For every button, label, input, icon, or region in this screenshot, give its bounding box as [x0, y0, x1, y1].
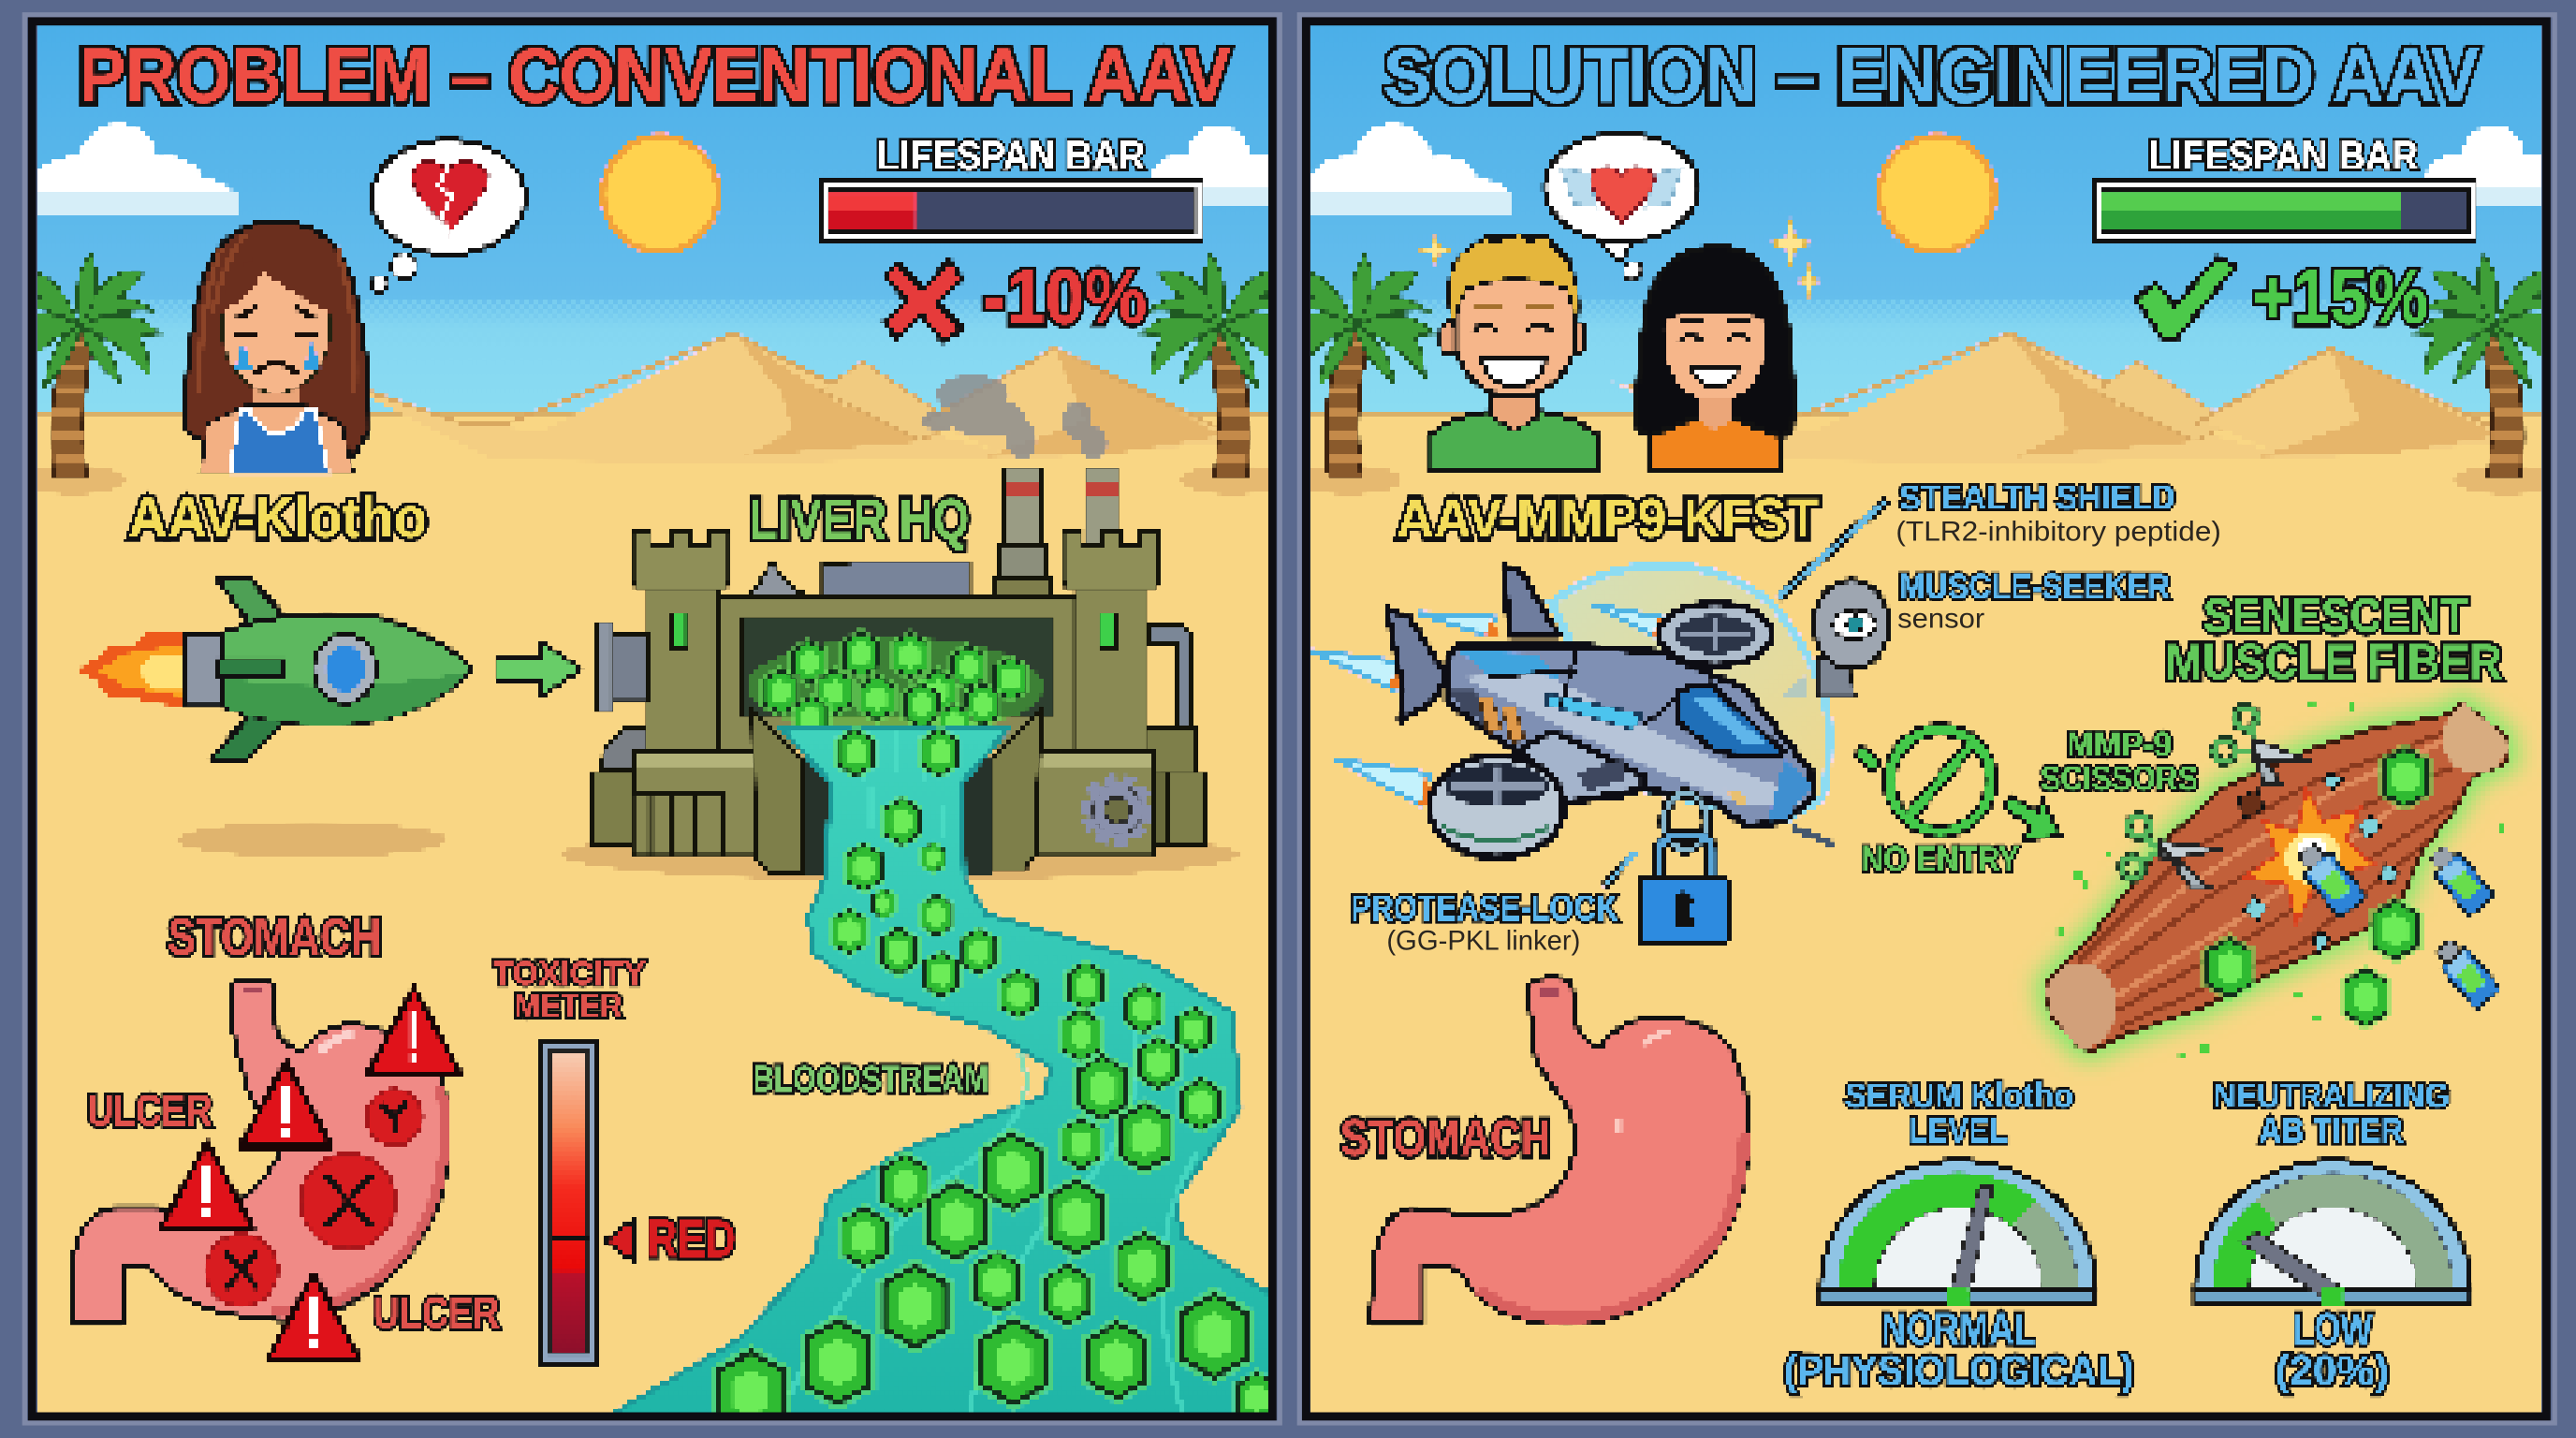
label: senescent muscle fiber: MUSCLE FIBER [2165, 635, 2502, 690]
MMP-9 scissors [2122, 708, 2310, 889]
stealth shield dome [1551, 565, 1829, 822]
warning triangles [161, 988, 460, 1358]
label: serum Klotho level: LEVEL [1909, 1111, 2008, 1150]
label: neutralizing AB titer: AB TITER [2259, 1111, 2404, 1150]
stray green particles [2056, 700, 2506, 1058]
right panel border [1299, 15, 2554, 1423]
label: senescent muscle fiber: SENESCENT [2203, 589, 2467, 644]
X mark [884, 259, 963, 342]
label: low 20 percent: LOW [2293, 1305, 2373, 1355]
label: ulcer bottom: ULCER [373, 1288, 500, 1338]
label: toxicity meter: TOXICITY [493, 955, 646, 991]
dunes [337, 333, 1224, 463]
lifespan label: LIFESPAN BAR [877, 133, 1145, 179]
happy man [1427, 233, 1599, 472]
label: low 20 percent: (20%) [2276, 1347, 2389, 1395]
title: SOLUTION – ENGINEERED AAV [1383, 33, 2479, 119]
leader line: protease lock [1603, 851, 1636, 888]
label: normal physiological: (PHYSIOLOGICAL) [1784, 1347, 2134, 1395]
panel: problem - conventional AAV [8, 20, 1314, 1438]
label: low 20 percent [2276, 1305, 2389, 1395]
title: PROBLEM – CONVENTIONAL AAV [79, 33, 1231, 119]
liver HQ fortress [562, 468, 1238, 881]
dunes [1612, 333, 2499, 463]
label: no entry: NO ENTRY [1862, 840, 2019, 878]
no entry sign [1889, 729, 1991, 831]
label: Liver HQ: LIVER HQ [749, 488, 970, 552]
label: neutralizing AB titer: NEUTRALIZING [2213, 1077, 2450, 1115]
sky [1308, 20, 2550, 416]
note: sensor: sensor [1897, 603, 1984, 634]
label: normal physiological [1784, 1305, 2134, 1395]
clouds [1308, 124, 2576, 215]
sun [603, 137, 718, 252]
lifespan bar [820, 181, 1203, 240]
lifespan bar [2095, 181, 2476, 240]
sky [30, 20, 1278, 416]
sad woman [185, 222, 370, 473]
palm trees [1283, 255, 2566, 494]
clouds [33, 124, 1314, 215]
note: TLR2-inhibitory peptide: (TLR2-inhibitory peptide) [1895, 516, 2221, 547]
label: red: RED [648, 1210, 736, 1269]
sparkles [1419, 220, 1822, 296]
left panel border [24, 15, 1280, 1423]
panel: solution - engineered AAV [1283, 20, 2576, 1416]
label: ulcer top: ULCER [87, 1086, 212, 1136]
note: GG-PKL linker: (GG-PKL linker) [1386, 925, 1580, 956]
muscle-seeker sensor [1781, 580, 1889, 697]
bloodstream river [611, 726, 1281, 1421]
thought bubble: broken heart [372, 139, 526, 292]
label: serum Klotho level: SERUM Klotho [1845, 1077, 2073, 1115]
virus particles in the liver [760, 628, 1030, 745]
speech bubble: winged heart [1544, 133, 1699, 280]
palm trees [8, 255, 1293, 494]
label: bloodstream: BLOODSTREAM [753, 1059, 989, 1099]
happy woman [1637, 246, 1793, 472]
label: muscle-seeker: MUSCLE-SEEKER [1899, 567, 2171, 606]
label: toxicity meter [493, 955, 646, 1024]
lifespan label: LIFESPAN BAR [2149, 133, 2419, 179]
label: MMP-9 scissors: MMP-9 [2067, 725, 2172, 763]
gear [1088, 781, 1147, 840]
label: toxicity meter: METER [514, 988, 622, 1024]
label: stealth shield: STEALTH SHIELD [1899, 478, 2175, 517]
label: neutralizing AB titer [2213, 1077, 2450, 1150]
sand [1308, 414, 2550, 1416]
green glow in liver [749, 637, 1044, 726]
leader line: stealth shield [1778, 500, 1888, 598]
healthy stomach [1370, 977, 1749, 1325]
label: MMP-9 scissors: SCISSORS [2041, 759, 2198, 798]
label: serum Klotho level [1845, 1077, 2073, 1150]
check mark [2136, 257, 2236, 339]
label: stomach: STOMACH [168, 909, 381, 966]
plus 15 percent: +15% [2252, 255, 2428, 341]
engineered aircraft [1311, 565, 1834, 858]
label: stomach: STOMACH [1340, 1109, 1551, 1167]
blocked stub and deflected arrow [1855, 746, 2062, 840]
sun [1880, 137, 1995, 252]
therapy vials [2292, 839, 2501, 1010]
smoke [922, 374, 1107, 460]
gauge: serum Klotho [1821, 1160, 2097, 1305]
toxicity meter [540, 1040, 598, 1364]
gauge: neutralizing AB titer [2195, 1160, 2471, 1305]
label: AAV-MMP9-KFST: AAV-MMP9-KFST [1397, 487, 1819, 550]
protease lock [1640, 794, 1728, 943]
virus capsids at muscle [2202, 742, 2433, 1031]
red pointer [605, 1219, 634, 1262]
rocket [76, 579, 472, 858]
sand [30, 414, 1278, 1416]
label: senescent muscle fiber [2165, 589, 2502, 690]
arrow to liver [496, 642, 581, 697]
label: normal physiological: NORMAL [1881, 1305, 2036, 1355]
label: protease lock: PROTEASE-LOCK [1351, 888, 1618, 929]
virus particles in the river [711, 726, 1281, 1438]
label: AAV-Klotho: AAV-Klotho [128, 486, 427, 550]
label: MMP-9 scissors [2041, 725, 2198, 798]
minus 10 percent: -10% [983, 255, 1147, 341]
damaged stomach [72, 979, 447, 1325]
senescent muscle fiber [2043, 701, 2513, 1050]
water streaks [788, 731, 1199, 1413]
